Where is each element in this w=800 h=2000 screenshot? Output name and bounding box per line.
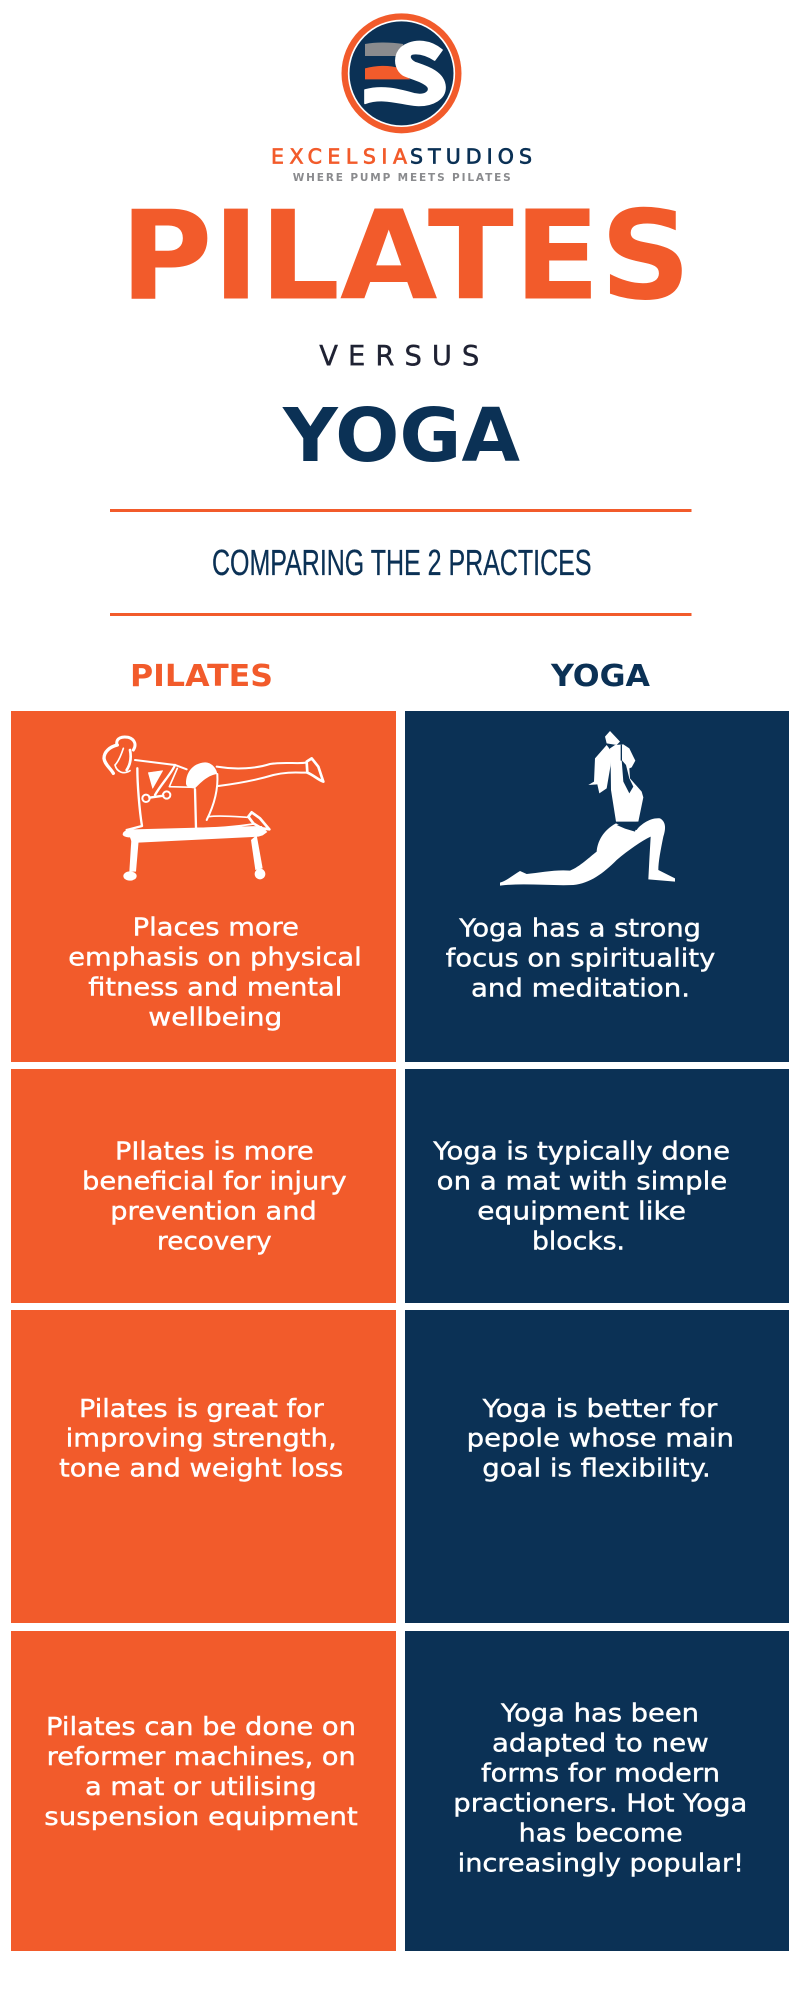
panel: pilates row 4	[11, 1631, 396, 1951]
text: yoga point 4: forms for modern	[481, 1758, 720, 1788]
text: pilates point 3	[59, 1394, 343, 1483]
text: yoga point 1: Yoga has a strong	[458, 914, 701, 943]
panel: pilates row 3	[11, 1310, 396, 1623]
text: yoga point 1: and meditation.	[471, 974, 690, 1003]
text: pilates point 4: a mat or utilising	[85, 1772, 317, 1801]
logo: Excelsia Studios: STUDIOS	[410, 144, 532, 168]
text: yoga point 3	[467, 1394, 734, 1483]
text: yoga point 2: Yoga is typically done	[432, 1136, 730, 1165]
text: pilates point 4	[44, 1712, 358, 1831]
text: pilates point 4: Pilates can be done on	[46, 1712, 356, 1741]
panel: yoga row 3	[405, 1310, 789, 1623]
panel: yoga row 1	[405, 711, 789, 1062]
text: pilates point 1: wellbeing	[148, 1003, 282, 1032]
logo: Excelsia Studios	[271, 13, 532, 184]
text: pilates point 3: Pilates is great for	[79, 1394, 325, 1423]
text: yoga point 1: focus on spirituality	[446, 944, 715, 973]
text: pilates point 2	[82, 1136, 347, 1255]
logo badge	[341, 13, 461, 133]
text: pilates point 1: fitness and mental	[88, 973, 342, 1002]
panel: yoga row 4	[405, 1631, 789, 1951]
text: pilates point 3: tone and weight loss	[59, 1454, 343, 1483]
text: yoga point 4: adapted to new	[492, 1728, 709, 1758]
text: yoga point 4: practioners. Hot Yoga	[453, 1788, 747, 1818]
text: pilates point 4: suspension equipment	[44, 1802, 358, 1831]
panel: pilates row 2	[11, 1069, 396, 1303]
text: pilates point 2: PIlates is more	[115, 1136, 314, 1165]
icon: yoga lunge figure	[500, 731, 675, 886]
text: pilates point 1	[68, 913, 362, 1032]
column heading: Pilates: PILATES	[130, 659, 273, 694]
text: yoga point 4: Yoga has been	[500, 1698, 699, 1728]
text: yoga point 1	[446, 914, 715, 1003]
text: yoga point 3: goal is flexibility.	[482, 1454, 711, 1483]
text: pilates point 1: emphasis on physical	[68, 943, 362, 972]
text: pilates point 1: Places more	[133, 913, 299, 942]
title: versus: VERSUS	[319, 341, 479, 372]
text: yoga point 3: pepole whose main	[467, 1424, 734, 1453]
text: pilates point 2: beneficial for injury	[82, 1166, 347, 1195]
text: pilates point 3: improving strength,	[66, 1424, 337, 1453]
text: yoga point 2: equipment like	[477, 1196, 686, 1225]
panel: pilates row 1	[11, 711, 396, 1062]
icon: pilates figure on bench	[104, 737, 323, 881]
text: pilates point 4: reformer machines, on	[47, 1742, 356, 1771]
text: pilates point 2: prevention and	[110, 1196, 317, 1225]
text: yoga point 4	[453, 1698, 747, 1878]
title: Yoga: YOGA	[282, 394, 520, 479]
title: Pilates: PILATES	[120, 185, 691, 329]
logo wordmark: EXCELSIA	[271, 144, 407, 168]
text: yoga point 4: has become	[519, 1818, 683, 1848]
text: yoga point 2: blocks.	[532, 1226, 625, 1255]
text: yoga point 3: Yoga is better for	[482, 1394, 718, 1423]
text: pilates point 2: recovery	[157, 1226, 272, 1255]
text: yoga point 4: increasingly popular!	[458, 1848, 744, 1878]
text: yoga point 2	[432, 1136, 730, 1255]
text: yoga point 2: on a mat with simple	[437, 1166, 727, 1195]
column heading: Yoga: YOGA	[550, 659, 651, 694]
logo tagline: WHERE PUMP MEETS PILATES	[293, 172, 511, 184]
subtitle: comparing the 2 practices: COMPARING THE 2 PRACTICES	[212, 542, 592, 583]
panel: yoga row 2	[405, 1069, 789, 1303]
